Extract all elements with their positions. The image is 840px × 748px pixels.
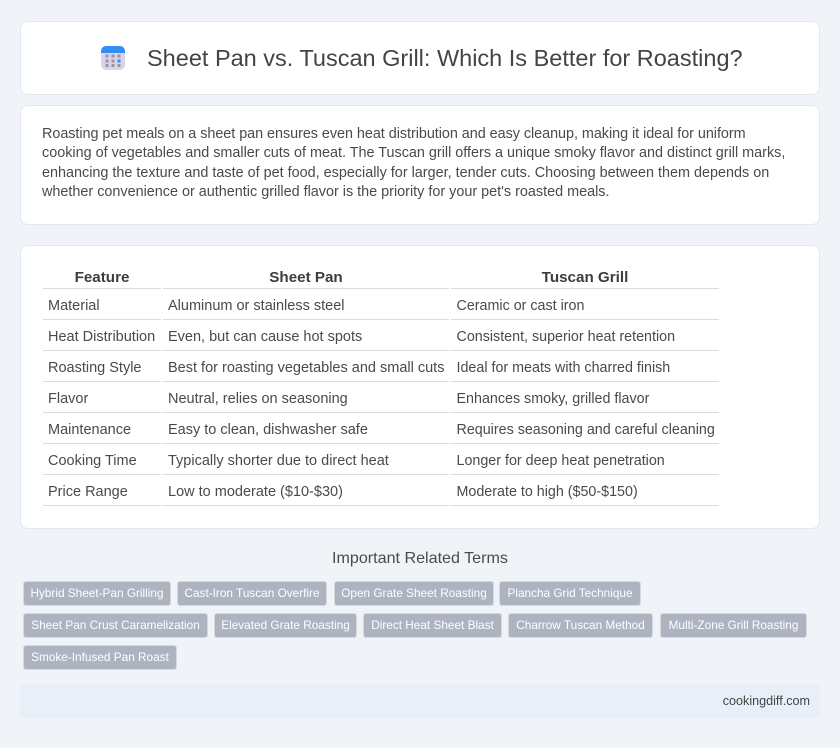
comparison table: Best for roasting vegetables and small cuts [168,360,444,376]
summary text: enhancing the texture and taste of pet food, especially for larger, tender cuts. Choosing between them depends on [42,165,769,181]
summary text: whether convenience or authentic grilled flavor is the priority for your pet's roasted meals. [42,184,609,200]
comparison table: Roasting Style [48,360,142,376]
title: Sheet Pan vs. Tuscan Grill: Which Is Better for Roasting? [147,45,743,71]
summary text [42,126,785,200]
comparison table: Cooking Time [48,452,137,468]
comparison table: Requires seasoning and careful cleaning [456,422,715,438]
comparison table: Maintenance [48,422,131,438]
comparison table: Feature [75,269,129,286]
related term tags: Charrow Tuscan Method [516,618,645,632]
icon: calendar [101,46,125,70]
related term tags: Smoke-Infused Pan Roast [31,650,169,664]
comparison table: Enhances smoky, grilled flavor [456,390,649,406]
comparison table: Tuscan Grill [542,269,628,286]
panel: summary [20,105,820,225]
comparison table: Aluminum or stainless steel [168,298,344,314]
related term tags [23,581,807,670]
comparison table: Heat Distribution [48,328,155,344]
related term tags: Direct Heat Sheet Blast [371,618,494,632]
comparison table: Ideal for meats with charred finish [456,360,670,376]
comparison table: Even, but can cause hot spots [168,328,362,344]
comparison table: Flavor [48,390,88,406]
panel: comparison table [20,245,820,529]
related term tags: Elevated Grate Roasting [221,618,350,632]
comparison table: Easy to clean, dishwasher safe [168,422,368,438]
comparison table: Typically shorter due to direct heat [168,452,389,468]
comparison table: Ceramic or cast iron [456,298,584,314]
comparison table: Price Range [48,484,128,500]
summary text: Roasting pet meals on a sheet pan ensures even heat distribution and easy cleanup, making it ideal for uniform [42,126,746,142]
comparison table: Longer for deep heat penetration [456,452,665,468]
related term tags: Sheet Pan Crust Caramelization [31,618,200,632]
comparison table: Sheet Pan [269,269,343,286]
footer source: cookingdiff.com [723,694,810,708]
comparison table: Material [48,298,100,314]
related term tags: Cast-Iron Tuscan Overfire [184,586,320,600]
comparison table: Neutral, relies on seasoning [168,390,348,406]
footer bar [20,684,820,718]
heading: related terms: Important Related Terms [332,549,508,567]
comparison table: Moderate to high ($50-$150) [456,484,638,500]
comparison table: Low to moderate ($10-$30) [168,484,343,500]
related term tags: Open Grate Sheet Roasting [341,586,487,600]
summary text: cooking of vegetables and smaller cuts of meat. The Tuscan grill offers a unique smoky flavor and distinct grill marks, [42,145,785,161]
related term tags: Hybrid Sheet-Pan Grilling [30,586,164,600]
header card [20,21,820,95]
comparison table [43,269,719,506]
related term tags: Plancha Grid Technique [507,586,633,600]
comparison table: Consistent, superior heat retention [456,328,675,344]
related term tags: Multi-Zone Grill Roasting [669,618,798,632]
